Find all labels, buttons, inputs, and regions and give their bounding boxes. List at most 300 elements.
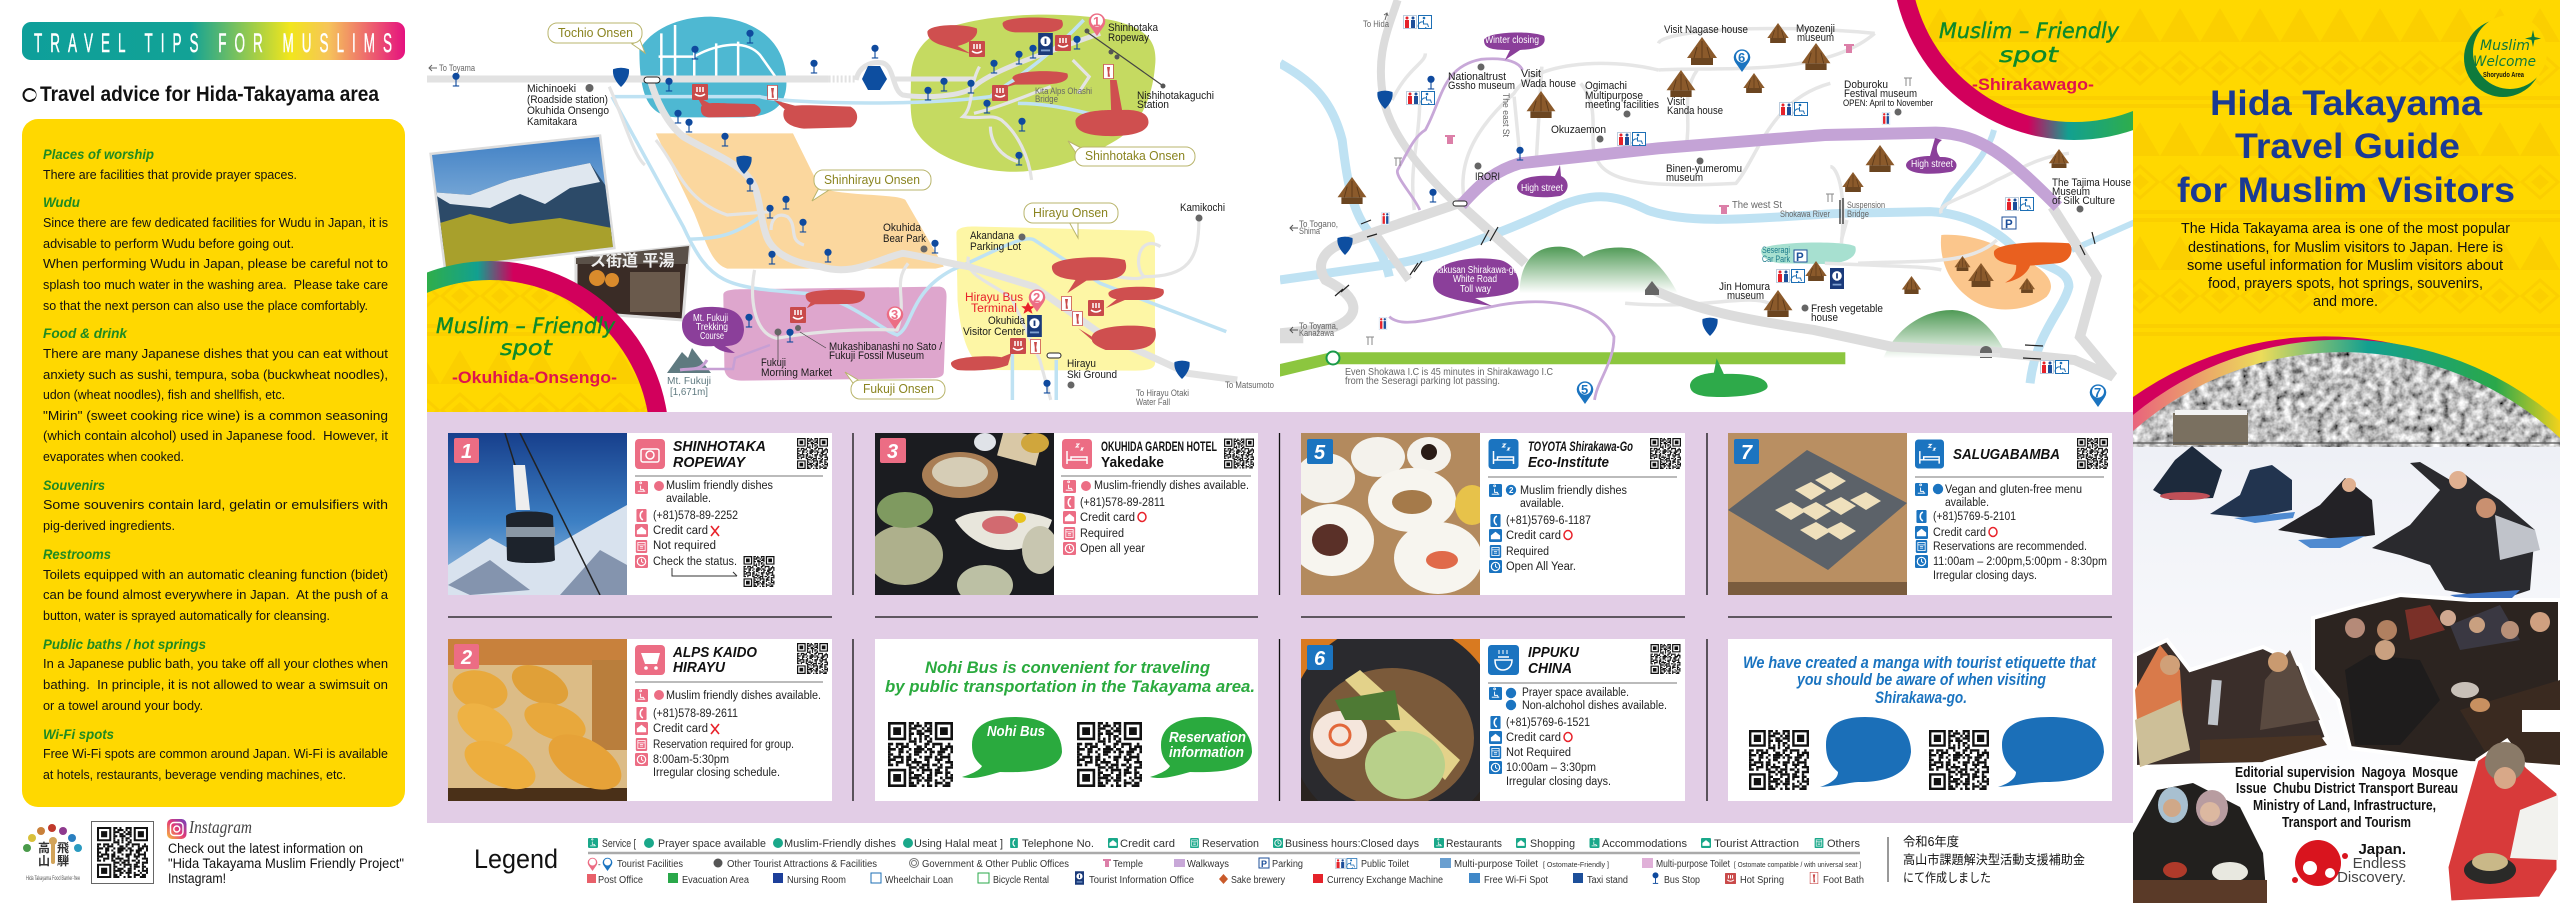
title [1528, 439, 1633, 471]
icon: accommodation [1488, 439, 1518, 469]
badge: 1 [454, 438, 479, 463]
QR code [1650, 644, 1680, 674]
section: food and drink: anxiety such as sushi, tempura, soba (buckwheat noodles), [43, 368, 388, 382]
icon: accommodation [1062, 439, 1092, 469]
logo: food barrier-free council: 高 [38, 840, 50, 855]
credit note: Japanese: 高山市課題解決型活動支援補助金 [1903, 852, 2085, 867]
facility pins: 5, 6, 7 [1577, 49, 2106, 407]
details [1489, 687, 1667, 788]
section: restrooms: Toilets equipped with an automatic cleaning function (bidet) [43, 568, 388, 582]
section: wudu [43, 194, 388, 313]
title: Travel Guide [2235, 127, 2460, 166]
logo: Japan Endless Discovery: Discovery. [2337, 869, 2406, 886]
title: Hida Takayama [2210, 84, 2483, 123]
map labels: right: Suspension [1847, 200, 1885, 210]
legend row: facility symbols [587, 871, 1864, 886]
credit note: Japanese: 令和6年度 [1903, 834, 1959, 849]
details [1915, 483, 2107, 582]
credits [2235, 765, 2458, 831]
legend row: service categories: Telephone No. [1022, 838, 1094, 850]
facility pins: 1, 2, 3: 1 [1093, 14, 1100, 29]
logo: Muslim Welcome: Shoryudo Area [2483, 72, 2524, 79]
icons: hot springs and foot baths [692, 33, 1113, 354]
section: wi-fi spots: Free Wi-Fi spots are common around Japan. Wi-Fi is available [43, 747, 388, 761]
card 1: Shinhotaka Ropeway [448, 433, 832, 595]
details: Muslim-friendly dishes available. [1094, 480, 1249, 492]
title: HIRAYU [673, 660, 725, 676]
legend row: facility symbols: Tourist Information Office [1089, 875, 1194, 886]
logo: Muslim Welcome: Muslim [2480, 38, 2530, 54]
badge: 5 [1307, 439, 1333, 464]
section: food and drink: udon (wheat noodles), fish and shellfish, etc. [43, 388, 285, 402]
photo: two women at table [2135, 640, 2327, 767]
map labels: left: Okuhida [988, 315, 1026, 327]
map labels: right: Kanazawa [1299, 328, 1334, 338]
intro text: and more. [2313, 293, 2378, 310]
rivers [612, 20, 1226, 400]
legend row: map symbols: Walkways [1187, 859, 1229, 870]
legend row: map symbols: - [598, 860, 601, 869]
legend row: map symbols: Public Toilet [1361, 859, 1409, 870]
walkways [1389, 59, 1614, 400]
section: wi-fi spots [43, 726, 388, 782]
heading [1743, 654, 2097, 707]
legend row: map symbols: Multi-purpose Toilet [1656, 859, 1730, 870]
intro text: The Hida Takayama area is one of the most popular [2181, 220, 2510, 237]
details: Irregular closing days. [1506, 776, 1611, 788]
section: public baths: In a Japanese public bath, you take off all your clothes when [43, 657, 388, 671]
icon: restaurant [1488, 645, 1519, 675]
details: Credit card [653, 723, 708, 735]
card 6: Ippuku China [1289, 622, 1685, 834]
map labels: right: Nationaltrust [1448, 71, 1506, 83]
title: OKUHIDA GARDEN HOTEL [1101, 439, 1217, 454]
facility pins: 5, 6, 7: 7 [2094, 385, 2101, 400]
title [2177, 84, 2515, 210]
map labels: right: Shima [1299, 226, 1320, 236]
map labels: right [1290, 13, 2131, 387]
spot panel: Shirakawago: spot [1999, 43, 2059, 67]
map labels: right: Even Shokawa I.C is 45 minutes in Shirakawago I.C [1345, 367, 1553, 378]
map labels: left: Kita Alps Ohashi [1035, 86, 1092, 96]
credit note: Japanese [1888, 834, 2085, 885]
spot panel: Okuhida-Onsengo: spot [500, 336, 553, 360]
map labels: left: To Matsumoto [1225, 380, 1274, 390]
map labels: left: Shinhotaka [1108, 22, 1159, 34]
photo: soba bowl [1289, 622, 1501, 834]
photo: group dining [2313, 595, 2560, 765]
map labels: right: Bridge [1847, 209, 1869, 219]
badge: 2: 2 [460, 647, 472, 669]
map labels: left: To Hirayu Otaki [1136, 388, 1189, 398]
spot panel: Shirakawago: Muslim – Friendly [1939, 19, 2120, 43]
details: Reservations are recommended. [1933, 541, 2087, 553]
section: wudu: Wudu [43, 194, 80, 210]
panel: cover [2133, 0, 2560, 903]
spot panel: Okuhida-Onsengo: -Okuhida-Onsengo- [452, 368, 617, 387]
map labels: left: To Toyama [439, 63, 475, 73]
map labels: right: The east St [1501, 93, 1511, 137]
map labels: right: Fresh vegetable [1811, 303, 1883, 315]
icon: shopping cart [635, 645, 665, 675]
green and orange callouts [1690, 358, 1768, 397]
icons: bus stops [452, 30, 1081, 394]
callout: trekking course: Trekking [696, 322, 728, 333]
legend [474, 838, 1864, 886]
map labels: right: Shokawa River [1780, 209, 1830, 219]
legend row: facility symbols: Currency Exchange Machine [1327, 875, 1443, 886]
badge: 3: 3 [887, 441, 898, 463]
panel: advice text [22, 119, 405, 807]
callout: trekking course [682, 307, 744, 353]
map labels: right: Wada house [1521, 78, 1576, 90]
map labels: left [429, 22, 1274, 407]
map: Okuhida Onsengo [427, 13, 1274, 412]
map labels: right: OPEN: April to November [1843, 98, 1933, 108]
details: Vegan and gluten-free menu [1945, 484, 2082, 496]
section: wudu: When performing Wudu in Japan, please be careful not to [43, 257, 388, 271]
legend row: facility symbols: Hot Spring [1740, 875, 1784, 886]
map labels: left: Hirayu Bus [965, 292, 1023, 304]
map labels: right: The west St [1732, 200, 1782, 211]
decorative arc and snow photo [2133, 336, 2560, 770]
legend row: map symbols: Multi-purpose Toilet [1454, 859, 1538, 870]
map labels: right: Visit Nagase house [1664, 24, 1748, 36]
section: wi-fi spots: at hotels, restaurants, beverage vending machines, etc. [43, 768, 346, 782]
details: Credit card [1080, 512, 1135, 524]
legend row: facility symbols: Nursing Room [787, 875, 846, 886]
instagram note: Instagram! [168, 871, 226, 886]
map labels: right: To Toyama, [1299, 321, 1338, 331]
legend row: facility symbols: Foot Bath [1823, 875, 1864, 886]
details: 11:00am – 2:00pm,5:00pm - 8:30pm [1933, 556, 2107, 568]
icons: bus, tunnels [1337, 76, 2000, 358]
details [635, 480, 774, 587]
section: restrooms [43, 546, 388, 623]
intro text: food, prayers spots, hot springs, souvenirs, [2208, 275, 2483, 292]
map labels: left: Okuhida [883, 222, 922, 234]
details: Required [1080, 528, 1124, 540]
details [1489, 484, 1627, 573]
map labels: right: Museum [2052, 186, 2090, 198]
section: public baths [43, 636, 388, 713]
icons: tunnels and hexagon [613, 66, 1190, 379]
map labels: left: Morning Market [761, 367, 832, 379]
banner: Travel tips for Muslims: TRAVEL TIPS FOR MUSLIMS [34, 28, 392, 58]
onsen label: Fukuji: Fukuji Onsen [863, 382, 934, 396]
facility pins: 5, 6, 7: 6 [1738, 50, 1745, 65]
legend row: facility symbols: Bus Stop [1664, 875, 1700, 886]
details: Irregular closing schedule. [653, 767, 780, 779]
section: restrooms: button, water is sprayed automatically for cleansing. [43, 609, 330, 623]
details: (+81)578-89-2811 [1080, 497, 1165, 509]
title [1528, 645, 1579, 677]
legend row: facility symbols: Free Wi-Fi Spot [1484, 875, 1548, 886]
map labels: right: Kanda house [1667, 105, 1723, 117]
map labels: right: Gssho museum [1448, 80, 1515, 92]
legend row: facility symbols: Evacuation Area [682, 875, 749, 886]
map labels: right: Multipurpose [1585, 90, 1643, 102]
map labels: right: Visit [1667, 96, 1685, 108]
map labels: right: of Silk Culture [2052, 195, 2115, 207]
logo: Japan Endless Discovery [2292, 840, 2406, 886]
onsen label: Shinhirayu: Shinhirayu Onsen [824, 173, 920, 187]
mountain: Mt. Fukuji [667, 345, 770, 398]
bubble: Nohi Bus [962, 717, 1062, 778]
section: food and drink: "Mirin" (sweet cooking rice wine) is a common seasoning [43, 409, 388, 423]
section: souvenirs [43, 477, 388, 533]
map labels: right: from the Seseragi parking lot passing. [1345, 376, 1500, 387]
section: food and drink: There are many Japanese dishes that you can eat without [43, 347, 389, 361]
photo: street shop [576, 244, 691, 320]
logo: food barrier-free council [23, 824, 82, 882]
onsen label: Hirayu [1024, 203, 1118, 238]
details [635, 689, 821, 779]
badge: 7: 7 [1741, 442, 1753, 464]
icons: parking, info, temples [1366, 44, 2016, 345]
callout: high street east [1906, 138, 1957, 174]
mountain: Mt. Fukuji: [1,671m] [670, 386, 708, 398]
details: Credit card [1506, 530, 1561, 542]
map labels: left: Visitor Center [963, 326, 1025, 338]
details: Credit card [653, 525, 708, 537]
callout: high street west [1517, 165, 1568, 197]
logo: food barrier-free council: 山 [38, 854, 50, 868]
map labels: left: Nishihotakaguchi [1137, 90, 1214, 102]
map labels: left: Bear Park [883, 233, 926, 245]
title: for Muslim Visitors [2177, 171, 2515, 210]
title: SHINHOTAKA [673, 439, 766, 455]
heading: by public transportation in the Takayama area. [885, 677, 1255, 696]
map labels: left: Hirayu [1067, 358, 1096, 370]
spot panel: Okuhida-Onsengo: Muslim – Friendly [436, 314, 616, 338]
thin roads [1392, 29, 2069, 305]
onsen label: Shinhotaka [1068, 141, 1195, 166]
legend row: service categories: Accommodations [1602, 838, 1687, 850]
details: (+81)5769-6-1187 [1506, 515, 1591, 527]
photo: sledding group [2153, 446, 2540, 603]
section: food and drink [43, 325, 389, 464]
heading [885, 658, 1255, 696]
badge: 5: 5 [1314, 442, 1326, 464]
map labels: left: Okuhida Onsengo [527, 105, 609, 117]
title: ROPEWAY [673, 455, 746, 471]
legend row: facility symbols: Bicycle Rental [993, 875, 1049, 886]
details: Prayer space available. [1522, 687, 1629, 699]
map labels: left: Mukashibanashi no Sato / [829, 341, 943, 353]
card 2: Alps Kaido Hirayu [448, 639, 832, 801]
legend row: facility symbols: Sake brewery [1231, 875, 1285, 886]
onsen label: Hirayu: Hirayu Onsen [1033, 206, 1108, 220]
legend row: service categories: Credit card [1120, 838, 1175, 850]
legend row: service categories: Muslim-Friendly dishes [784, 838, 896, 850]
legend row: service categories: Prayer space available [658, 838, 766, 850]
facility pins: 1, 2, 3 [887, 13, 1105, 329]
onsen label: Tochio [548, 23, 645, 53]
map labels: right: museum [1727, 290, 1764, 302]
bubble: Reservation information: information [1169, 744, 1244, 761]
map: Shirakawago [1280, 0, 2140, 407]
photo: ropeway [448, 433, 627, 595]
map labels: right: Myozenji [1796, 23, 1835, 35]
badge: 2 [454, 644, 479, 669]
QR code: manga 2 [1929, 730, 1989, 790]
map labels: right: Okuzaemon [1551, 124, 1606, 136]
section: places of worship: Places of worship [43, 146, 154, 162]
icons: toilets [1379, 16, 2068, 375]
icons: parking, info, temples: P [2005, 219, 2013, 231]
details: Not required [653, 540, 716, 552]
map labels: left: Akandana [970, 230, 1015, 242]
logo: Japan Endless Discovery: Japan. [2358, 841, 2406, 858]
bubble: Reservation information [1150, 717, 1252, 778]
icons: gassho houses [1338, 23, 2069, 317]
facility pins: 1, 2, 3: 3 [891, 307, 898, 322]
credits: Editorial supervision Nagoya Mosque [2235, 765, 2458, 781]
details: Not Required [1506, 747, 1571, 759]
callout: toll way: Toll way [1460, 284, 1491, 295]
legend row: map symbols: [ Ostomate-Friendly ] [1543, 862, 1609, 869]
legend row: service categories: Others [1827, 838, 1860, 850]
legend row: facility symbols: Wheelchair Loan [885, 875, 953, 886]
section: wudu: splash too much water in the washing area. Please take care [43, 278, 388, 292]
details: (+81)5769-5-2101 [1933, 511, 2016, 523]
map labels: left: Ski Ground [1067, 369, 1117, 381]
logo: food barrier-free council: 飛 [57, 841, 69, 855]
map labels: left: Station [1137, 99, 1169, 111]
details: (+81)5769-6-1521 [1506, 717, 1590, 729]
credits: Transport and Tourism [2282, 815, 2411, 831]
map labels: left: Michinoeki [527, 83, 576, 95]
legend row: service categories: Business hours:Closed days [1285, 838, 1419, 850]
photo: mountains [430, 135, 620, 270]
bubble: manga 1 [1820, 717, 1911, 787]
main roads [427, 33, 1237, 380]
heading: Shirakawa-go. [1875, 689, 1967, 707]
map labels: left: Bridge [1035, 94, 1058, 104]
details: 8:00am-5:30pm [653, 754, 729, 766]
badge: 1: 1 [461, 441, 472, 463]
section: food and drink: (which contain alcohol) used in Japanese food. However, it [43, 429, 389, 443]
details: Credit card [1506, 732, 1561, 744]
icon: camera [635, 439, 665, 469]
legend row: map symbols: Tourist Facilities [617, 859, 683, 870]
section: food and drink: Food & drink [43, 325, 128, 341]
callout: toll way [1433, 258, 1519, 306]
title: Yakedake [1101, 455, 1164, 471]
photo: plated dishes [1290, 433, 1489, 595]
photo: woman with bowl [2447, 740, 2558, 902]
legend row: service categories: Tourist Attraction [1714, 838, 1799, 850]
card: Nohi Bus [875, 639, 1258, 801]
details: available. [1945, 497, 1989, 509]
onsen label: Shinhotaka: Shinhotaka Onsen [1085, 149, 1185, 163]
map labels: right: Doburoku [1844, 79, 1888, 91]
QR code [797, 643, 828, 674]
legend row: map symbols: Parking [1272, 859, 1303, 870]
title: TOYOTA Shirakawa-Go [1528, 439, 1633, 454]
section: wudu: Since there are few dedicated facilities for Wudu in Japan, it is [43, 216, 388, 230]
map labels: right: Ogimachi [1585, 80, 1627, 92]
card 3: Okuhida Garden Hotel Yakedake [867, 428, 1258, 605]
QR code [1224, 438, 1254, 468]
badge: 7 [1734, 439, 1759, 464]
map labels: right: Jin Homura [1719, 281, 1771, 293]
photo: two women with meal [2133, 783, 2267, 903]
callout: high street east: High street [1911, 159, 1953, 170]
rivers [1280, 63, 2140, 383]
green expressway [1280, 352, 1845, 377]
spot panel: Okuhida-Onsengo [427, 261, 667, 412]
map labels: right: museum [1797, 32, 1834, 44]
title [673, 439, 766, 471]
title: IPPUKU [1528, 645, 1579, 661]
callout: high street west: High street [1521, 183, 1563, 194]
section: souvenirs: pig-derived ingredients. [43, 519, 175, 533]
callout: trekking course: Course [700, 331, 724, 342]
legend row: service categories: Service [ [602, 838, 636, 850]
onsen label: Shinhirayu [812, 170, 931, 201]
bubble: Nohi Bus: Nohi Bus [987, 723, 1045, 740]
map labels: left: (Roadside station) [527, 94, 608, 106]
title [1101, 439, 1217, 471]
map labels: left: Kamitakara [527, 116, 578, 128]
map labels: right: Binen-yumeromu [1666, 163, 1742, 175]
legend row: map symbols: Government & Other Public Offices [922, 859, 1069, 870]
credits: Issue Chubu District Transport Bureau [2236, 781, 2458, 797]
section: wudu: so that the next person can also use the place comfortably. [43, 299, 368, 313]
map labels: right: meeting facilities [1585, 99, 1659, 111]
details: (+81)578-89-2611 [653, 708, 738, 720]
legend title: Legend [474, 844, 558, 874]
ropeway line [1086, 32, 1163, 86]
section: souvenirs: Souvenirs [43, 477, 105, 493]
logo: Muslim Welcome: Welcome [2473, 54, 2536, 70]
dividers [448, 433, 2112, 801]
section: restrooms: Restrooms [43, 546, 111, 562]
map labels: left: Ropeway [1108, 32, 1149, 44]
intro text: some useful information for Muslim visitors about [2187, 257, 2504, 274]
section: food and drink: evaporates when cooked. [43, 450, 184, 464]
red callouts [697, 18, 1164, 371]
legend row: service categories: Reservation [1202, 838, 1259, 850]
QR code [2077, 438, 2108, 469]
photo: croissants [448, 639, 631, 801]
map labels: left: Parking Lot [970, 241, 1021, 253]
section: public baths: bathing. In principle, it is not allowed to wear a swimsuit on [43, 678, 388, 692]
QR code: reservation [1077, 722, 1142, 787]
photo: kaiseki meal [867, 428, 1058, 605]
title: CHINA [1528, 661, 1572, 677]
callout: trekking course: Mt. Fukuji [693, 313, 728, 324]
credit note: Japanese: にて作成しました [1903, 871, 1991, 885]
legend row: facility symbols: Taxi stand [1587, 875, 1628, 886]
spot panel: Shirakawago: -Shirakawago- [1972, 75, 2094, 94]
logo: food barrier-free council: Hida Takayama Food Barrier-free [26, 876, 80, 882]
section: souvenirs: Some souvenirs contain lard, gelatin or emulsifiers with [43, 498, 388, 512]
map labels: right: house [1811, 312, 1838, 324]
callout: toll way: White Road [1453, 274, 1497, 285]
map labels: left: Fukuji Fossil Museum [829, 350, 924, 362]
callout: winter closing [1484, 33, 1545, 60]
map labels: right: Seseragi [1762, 245, 1790, 255]
section: wudu: advisable to perform Wudu before going out. [43, 237, 294, 251]
QR code: Instagram [92, 822, 154, 884]
section: public baths: or a towel around your body. [43, 699, 203, 713]
badge: 6 [1307, 645, 1333, 670]
legend row: service categories [588, 838, 1860, 850]
legend row: service categories: Shopping [1530, 838, 1575, 850]
